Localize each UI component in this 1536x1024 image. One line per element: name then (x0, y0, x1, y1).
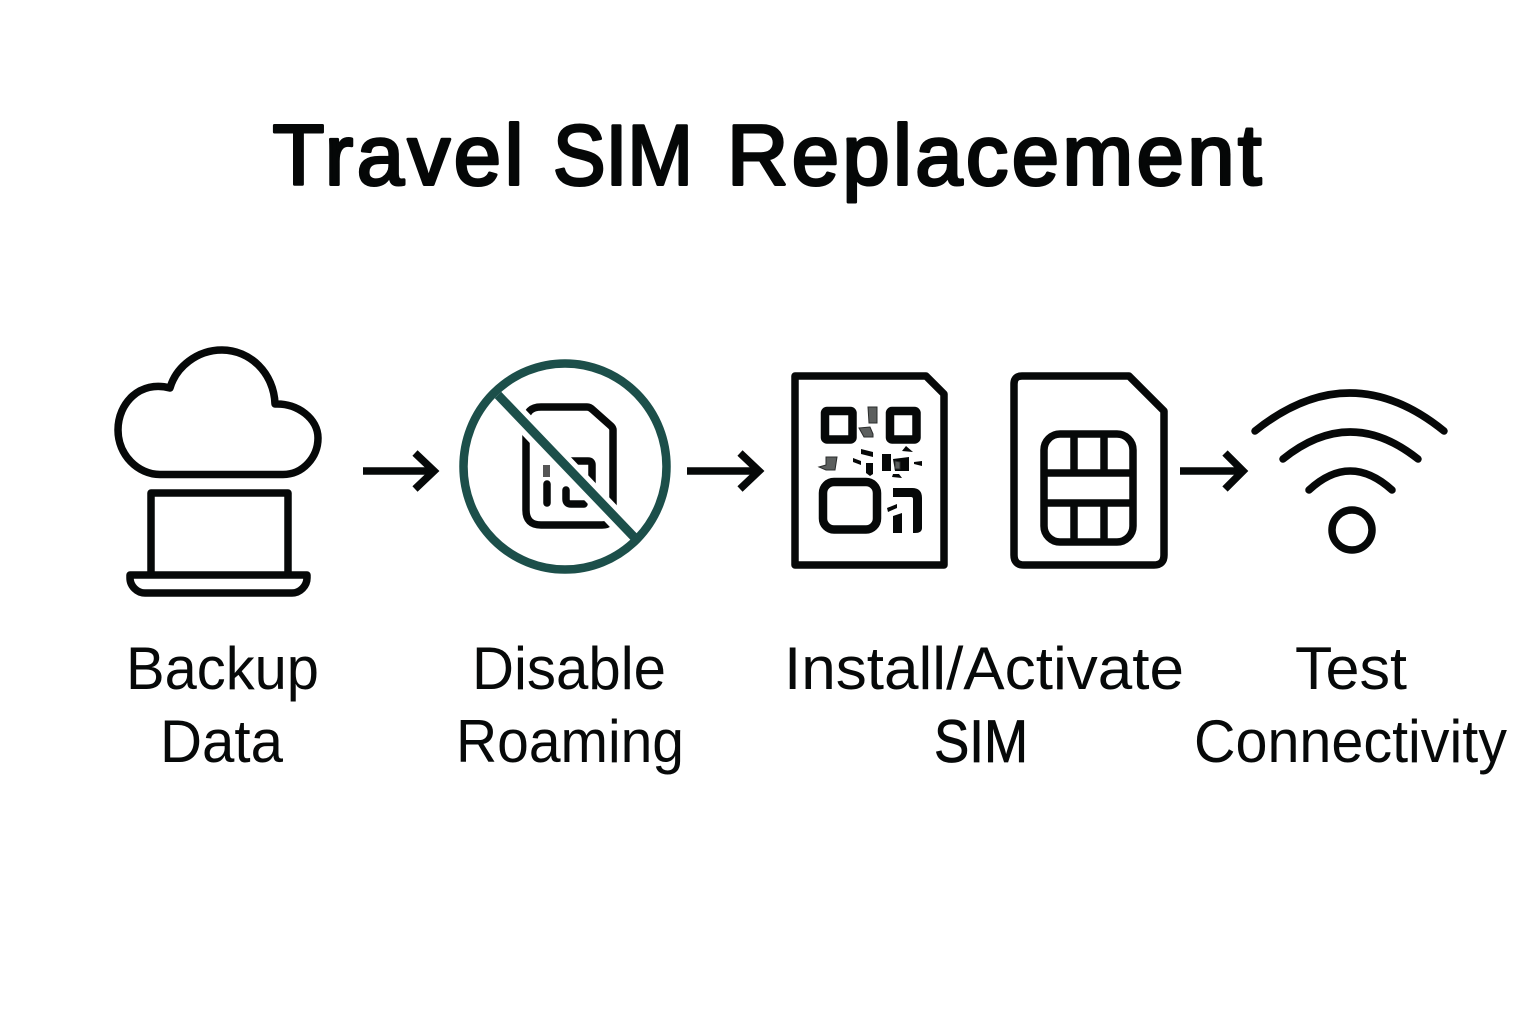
label: backup data: Backup (126, 635, 319, 702)
title: SIM (553, 108, 693, 204)
label: install/activate SIM: Install/Activate (784, 635, 1184, 702)
chip contacts (1044, 434, 1133, 542)
icon: QR code SIM card (795, 376, 944, 565)
crossed SIM card (526, 407, 613, 525)
QR scattered dark modules (853, 446, 922, 512)
QR bottom right bracket (893, 488, 922, 533)
label: test connectivity: Test (1295, 635, 1407, 702)
arrow: backup to disable (363, 453, 434, 489)
arrow: disable to install (687, 453, 759, 489)
prohibition circle (464, 364, 666, 570)
QR finder top right (890, 411, 916, 440)
label: backup data (126, 635, 319, 775)
label: disable roaming (456, 635, 684, 775)
laptop screen (151, 493, 288, 572)
QR finder top left (825, 411, 852, 440)
icon: SIM card with chip (1014, 376, 1164, 565)
icon: wifi signal (1255, 393, 1444, 550)
label: disable roaming: Disable (472, 635, 666, 702)
label: install/activate SIM (784, 635, 1184, 775)
icon: cloud above laptop (118, 350, 318, 593)
QR scattered grey modules (819, 407, 900, 470)
title (272, 108, 1262, 204)
card outline (795, 376, 944, 565)
slash gap (494, 391, 638, 542)
label: test connectivity (1194, 635, 1507, 775)
label: test connectivity: Connectivity (1194, 708, 1507, 775)
icon: disabled SIM card (464, 364, 666, 570)
card outline (1014, 376, 1164, 565)
wifi inner arc (1309, 471, 1392, 490)
label: install/activate SIM: SIM (934, 708, 1028, 775)
title: Replacement (727, 108, 1262, 204)
label: disable roaming: Roaming (456, 708, 684, 775)
laptop base (130, 575, 307, 593)
title: Travel (272, 108, 524, 204)
cloud outline (118, 350, 318, 474)
chip (1044, 434, 1133, 542)
arrow: install to test (1180, 453, 1243, 489)
wifi middle arc (1283, 432, 1418, 459)
label: backup data: Data (160, 708, 284, 775)
wifi dot (1332, 510, 1372, 550)
SIM chip fragment (543, 465, 550, 477)
QR large bottom left square (823, 482, 877, 530)
wifi outer arc (1255, 393, 1444, 431)
prohibition slash (498, 395, 634, 537)
QR bottom right stub (893, 513, 902, 533)
